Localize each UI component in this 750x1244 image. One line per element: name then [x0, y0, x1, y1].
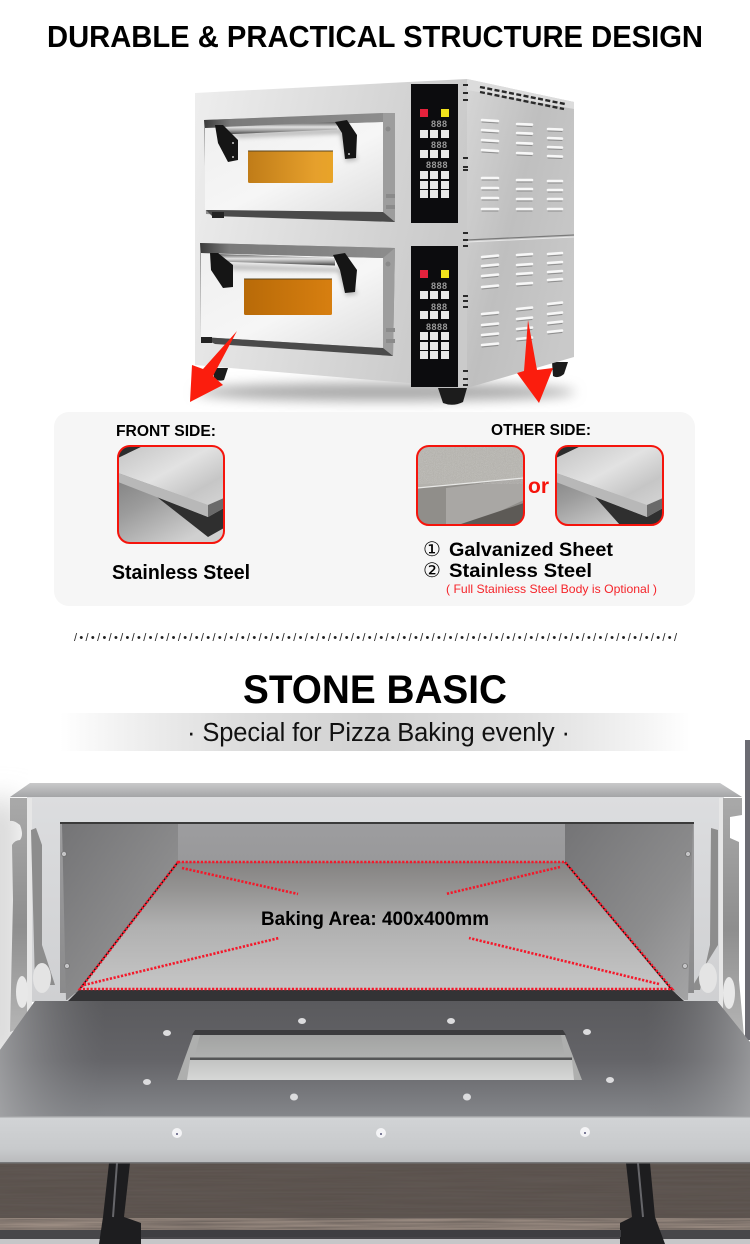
oven side panels: [467, 79, 574, 388]
heading: other side: OTHER SIDE:: [491, 422, 591, 439]
swatch: front stainless steel: [118, 446, 224, 543]
red dotted baking area outline: [80, 862, 672, 989]
stone base floor: [79, 862, 672, 990]
oven feet: [213, 362, 568, 405]
lower handle: [217, 254, 335, 266]
label: baking area: Baking Area: 400x400mm: [261, 909, 489, 930]
open oven door: [0, 1001, 750, 1118]
upper oven window: [248, 151, 333, 183]
divider: slash and dot pattern: /•/•/•/•/•/•/•/•/•/•/•/•/•/•/•/•/•/•/•/•/•/•/•/•/•/•/•/•/•/•/•/•/•/•/•/•/•/•/•/•/•/•/•/•/•/•/•/•/•/•/•/•/: [74, 632, 678, 644]
upper handle: [222, 122, 337, 134]
label: or: or: [528, 475, 549, 498]
floor front gap: [68, 990, 684, 1001]
lower control panel: [411, 246, 458, 387]
vent slots beside control panels: [463, 85, 468, 385]
frame top lid: [10, 783, 742, 797]
panel: material comparison: [54, 412, 695, 606]
chamber right wall: [565, 824, 693, 1000]
list: material options: [423, 537, 614, 582]
lower oven window: [244, 279, 332, 315]
upper control panel: 8888: [426, 160, 448, 170]
subtitle band: · Special for Pizza Baking evenly ·: [187, 719, 570, 747]
upper control panel: 888: [431, 140, 448, 150]
lower door: [200, 243, 395, 356]
swatch: galvanized sheet: [417, 446, 524, 525]
lower hinges: [386, 262, 395, 343]
door front lip: [0, 1116, 750, 1164]
dark strip at right edge: [745, 740, 750, 1040]
list: material options: Stainless Steel: [449, 560, 592, 582]
list: material options: Galvanized Sheet: [449, 539, 614, 561]
upper door: [204, 113, 395, 222]
heading: stone basic: STONE BASIC: [243, 668, 507, 712]
chamber back wall: [60, 823, 694, 993]
upper hinges: [386, 126, 395, 209]
louvers: [482, 122, 562, 347]
door screws: [143, 1018, 614, 1100]
lower handle shadow: [220, 264, 358, 296]
oven legs: [99, 1163, 665, 1244]
left side bracket: [10, 798, 55, 1032]
note: optional full stainless body: ( Full Stainiess Steel Body is Optional ): [446, 582, 657, 596]
arrow: to other side: [517, 320, 553, 403]
subtitle band: [60, 713, 690, 751]
upper control panel: 888: [431, 119, 448, 129]
floor shadow: [195, 383, 575, 401]
arrow: to front side: [190, 331, 237, 402]
title: durable and practical structure design: DURABLE & PRACTICAL STRUCTURE DESIGN: [47, 19, 703, 54]
lip screws: [172, 1127, 590, 1138]
list: material options: ①: [423, 537, 441, 561]
photo: open oven chamber with stone base: [0, 740, 750, 1244]
upper control panel: [411, 84, 458, 223]
upper handle shadow: [226, 128, 358, 162]
heading: front side: FRONT SIDE:: [116, 423, 216, 440]
chamber left wall: [62, 824, 178, 1000]
lower control panel: 8888: [426, 322, 448, 332]
wall screws: [62, 852, 690, 968]
wood tabletop: [0, 1163, 750, 1244]
swatch: other side stainless steel: [556, 446, 663, 525]
oven front face: [195, 79, 467, 388]
product photo: double deck oven: [190, 79, 575, 405]
right side bracket: [690, 798, 744, 1036]
backdrop haze: [0, 800, 20, 1060]
frame face: [27, 797, 724, 1002]
list: material options: ②: [423, 558, 441, 582]
door window opening: [177, 1030, 582, 1080]
label: stainless steel: Stainless Steel: [112, 562, 250, 584]
lower control panel: 888: [431, 281, 448, 291]
lower control panel: 888: [431, 302, 448, 312]
